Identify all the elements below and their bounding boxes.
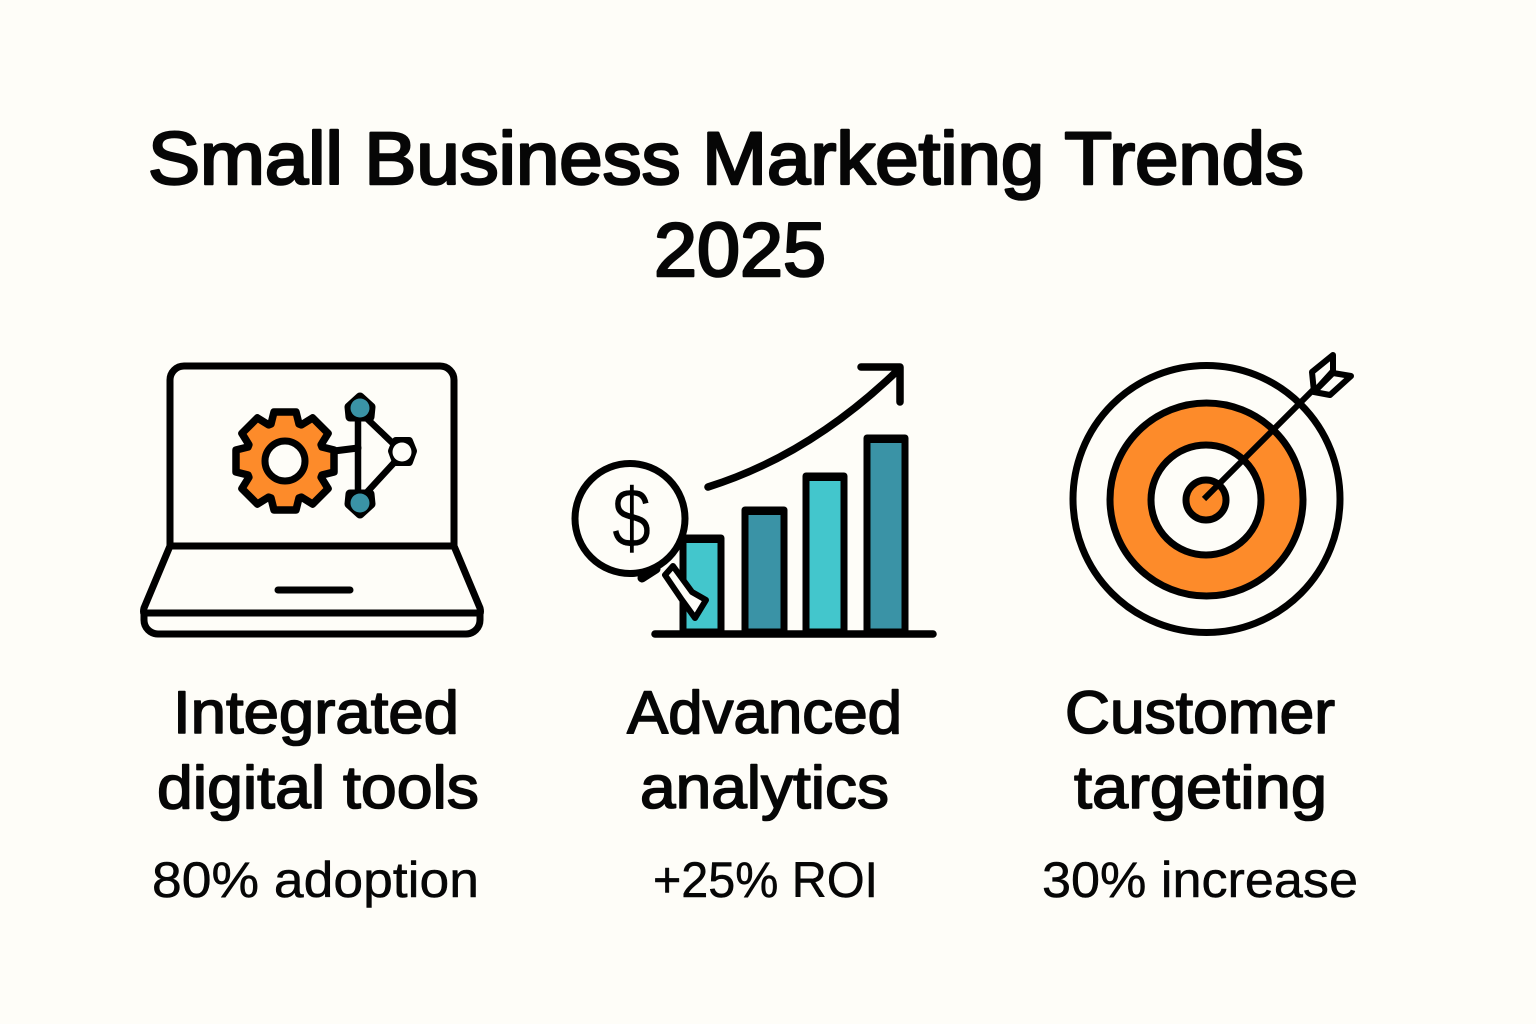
dollar sign: $	[612, 471, 651, 565]
laptop screen	[170, 366, 454, 546]
trackpad slot	[278, 586, 350, 594]
stat: +25% ROI: +25% ROI	[653, 852, 878, 908]
icon: target with arrow	[1073, 355, 1351, 632]
network lines	[358, 410, 403, 502]
panel: advanced analytics	[575, 367, 933, 908]
label: advanced analytics: analytics	[640, 754, 889, 821]
network node right	[392, 441, 413, 462]
title: Small Business Marketing Trends	[148, 117, 1304, 200]
panel: customer targeting	[1042, 355, 1358, 908]
icon: bar chart with magnifier	[575, 367, 933, 634]
title	[148, 117, 1304, 293]
magnifier lens	[575, 464, 685, 574]
stat: 30% increase: 30% increase	[1042, 852, 1358, 908]
stat: 80% adoption: 80% adoption	[152, 852, 479, 908]
label: integrated digital tools	[157, 679, 479, 821]
magnifier handle	[642, 566, 706, 618]
label: integrated digital tools: digital tools	[157, 754, 479, 821]
icon: laptop with gear and network	[144, 366, 480, 634]
bar chart	[655, 438, 933, 634]
network node top	[349, 397, 371, 418]
label: advanced analytics	[627, 679, 902, 821]
arrow fletching	[1312, 355, 1351, 395]
label: customer targeting: targeting	[1074, 754, 1327, 821]
panel: integrated digital tools	[144, 366, 480, 908]
gear	[236, 412, 334, 510]
label: customer targeting	[1065, 679, 1335, 821]
title: 2025	[654, 208, 826, 293]
target rings	[1073, 366, 1340, 632]
label: customer targeting: Customer	[1065, 679, 1335, 746]
network node bottom	[349, 494, 371, 514]
laptop base	[144, 546, 480, 634]
connector line	[334, 448, 358, 451]
label: advanced analytics: Advanced	[627, 679, 902, 746]
label: integrated digital tools: Integrated	[173, 679, 459, 746]
growth arrow	[708, 367, 900, 487]
arrow shaft	[1204, 389, 1314, 499]
